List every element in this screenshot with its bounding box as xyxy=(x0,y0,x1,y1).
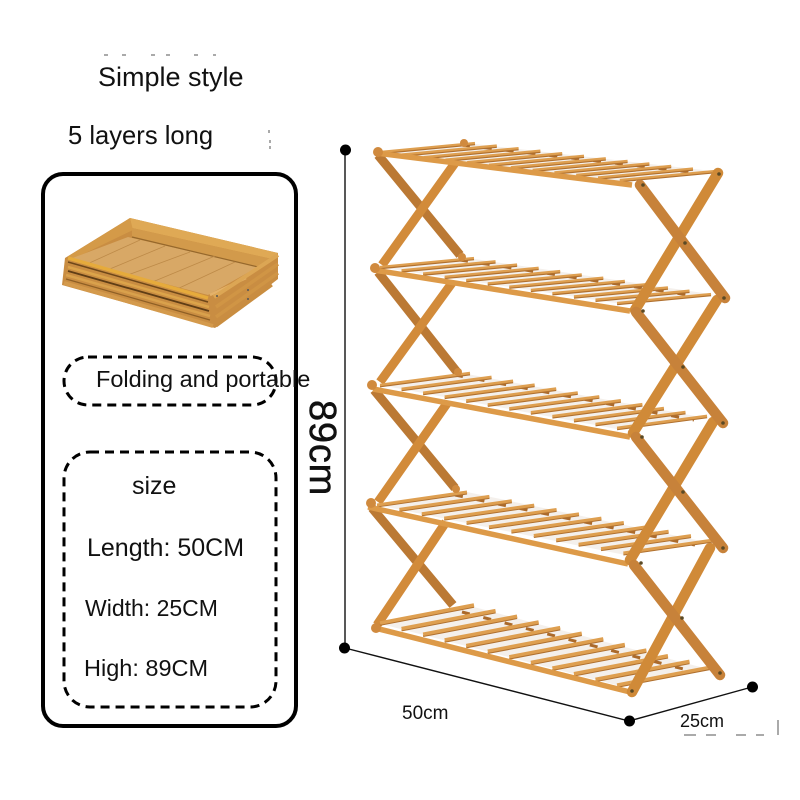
spec: length: Length: 50CM xyxy=(87,534,244,562)
shelf layer 2 xyxy=(370,253,711,311)
label: size: size xyxy=(132,472,176,500)
dimension lines xyxy=(339,144,758,726)
panel: product features xyxy=(43,174,310,726)
label: length 50cm: 50cm xyxy=(402,703,448,724)
shelf layer 1 xyxy=(373,139,715,185)
spec: width: Width: 25CM xyxy=(85,595,218,621)
dashed pill: folding and portable xyxy=(64,357,310,405)
right folding legs xyxy=(630,172,726,693)
shelf layer 3 xyxy=(367,368,707,437)
heading: simple style: Simple style xyxy=(98,62,244,92)
label: folding and portable: Folding and portable xyxy=(96,366,310,392)
label: width 25cm: 25cm xyxy=(680,711,724,731)
shelf layer 4 xyxy=(366,485,713,564)
shelf layer 5 xyxy=(371,605,711,692)
label: height 89cm: 89cm xyxy=(301,400,343,496)
spec: height: High: 89CM xyxy=(84,655,208,681)
photo: folded shelf xyxy=(62,218,278,328)
photo: five-layer bamboo shelf xyxy=(366,139,726,693)
left folding legs xyxy=(372,155,460,625)
stray marks: cropped fragments xyxy=(104,55,778,735)
heading: 5 layers long: 5 layers long xyxy=(68,122,213,150)
dashed box: size xyxy=(64,452,276,707)
